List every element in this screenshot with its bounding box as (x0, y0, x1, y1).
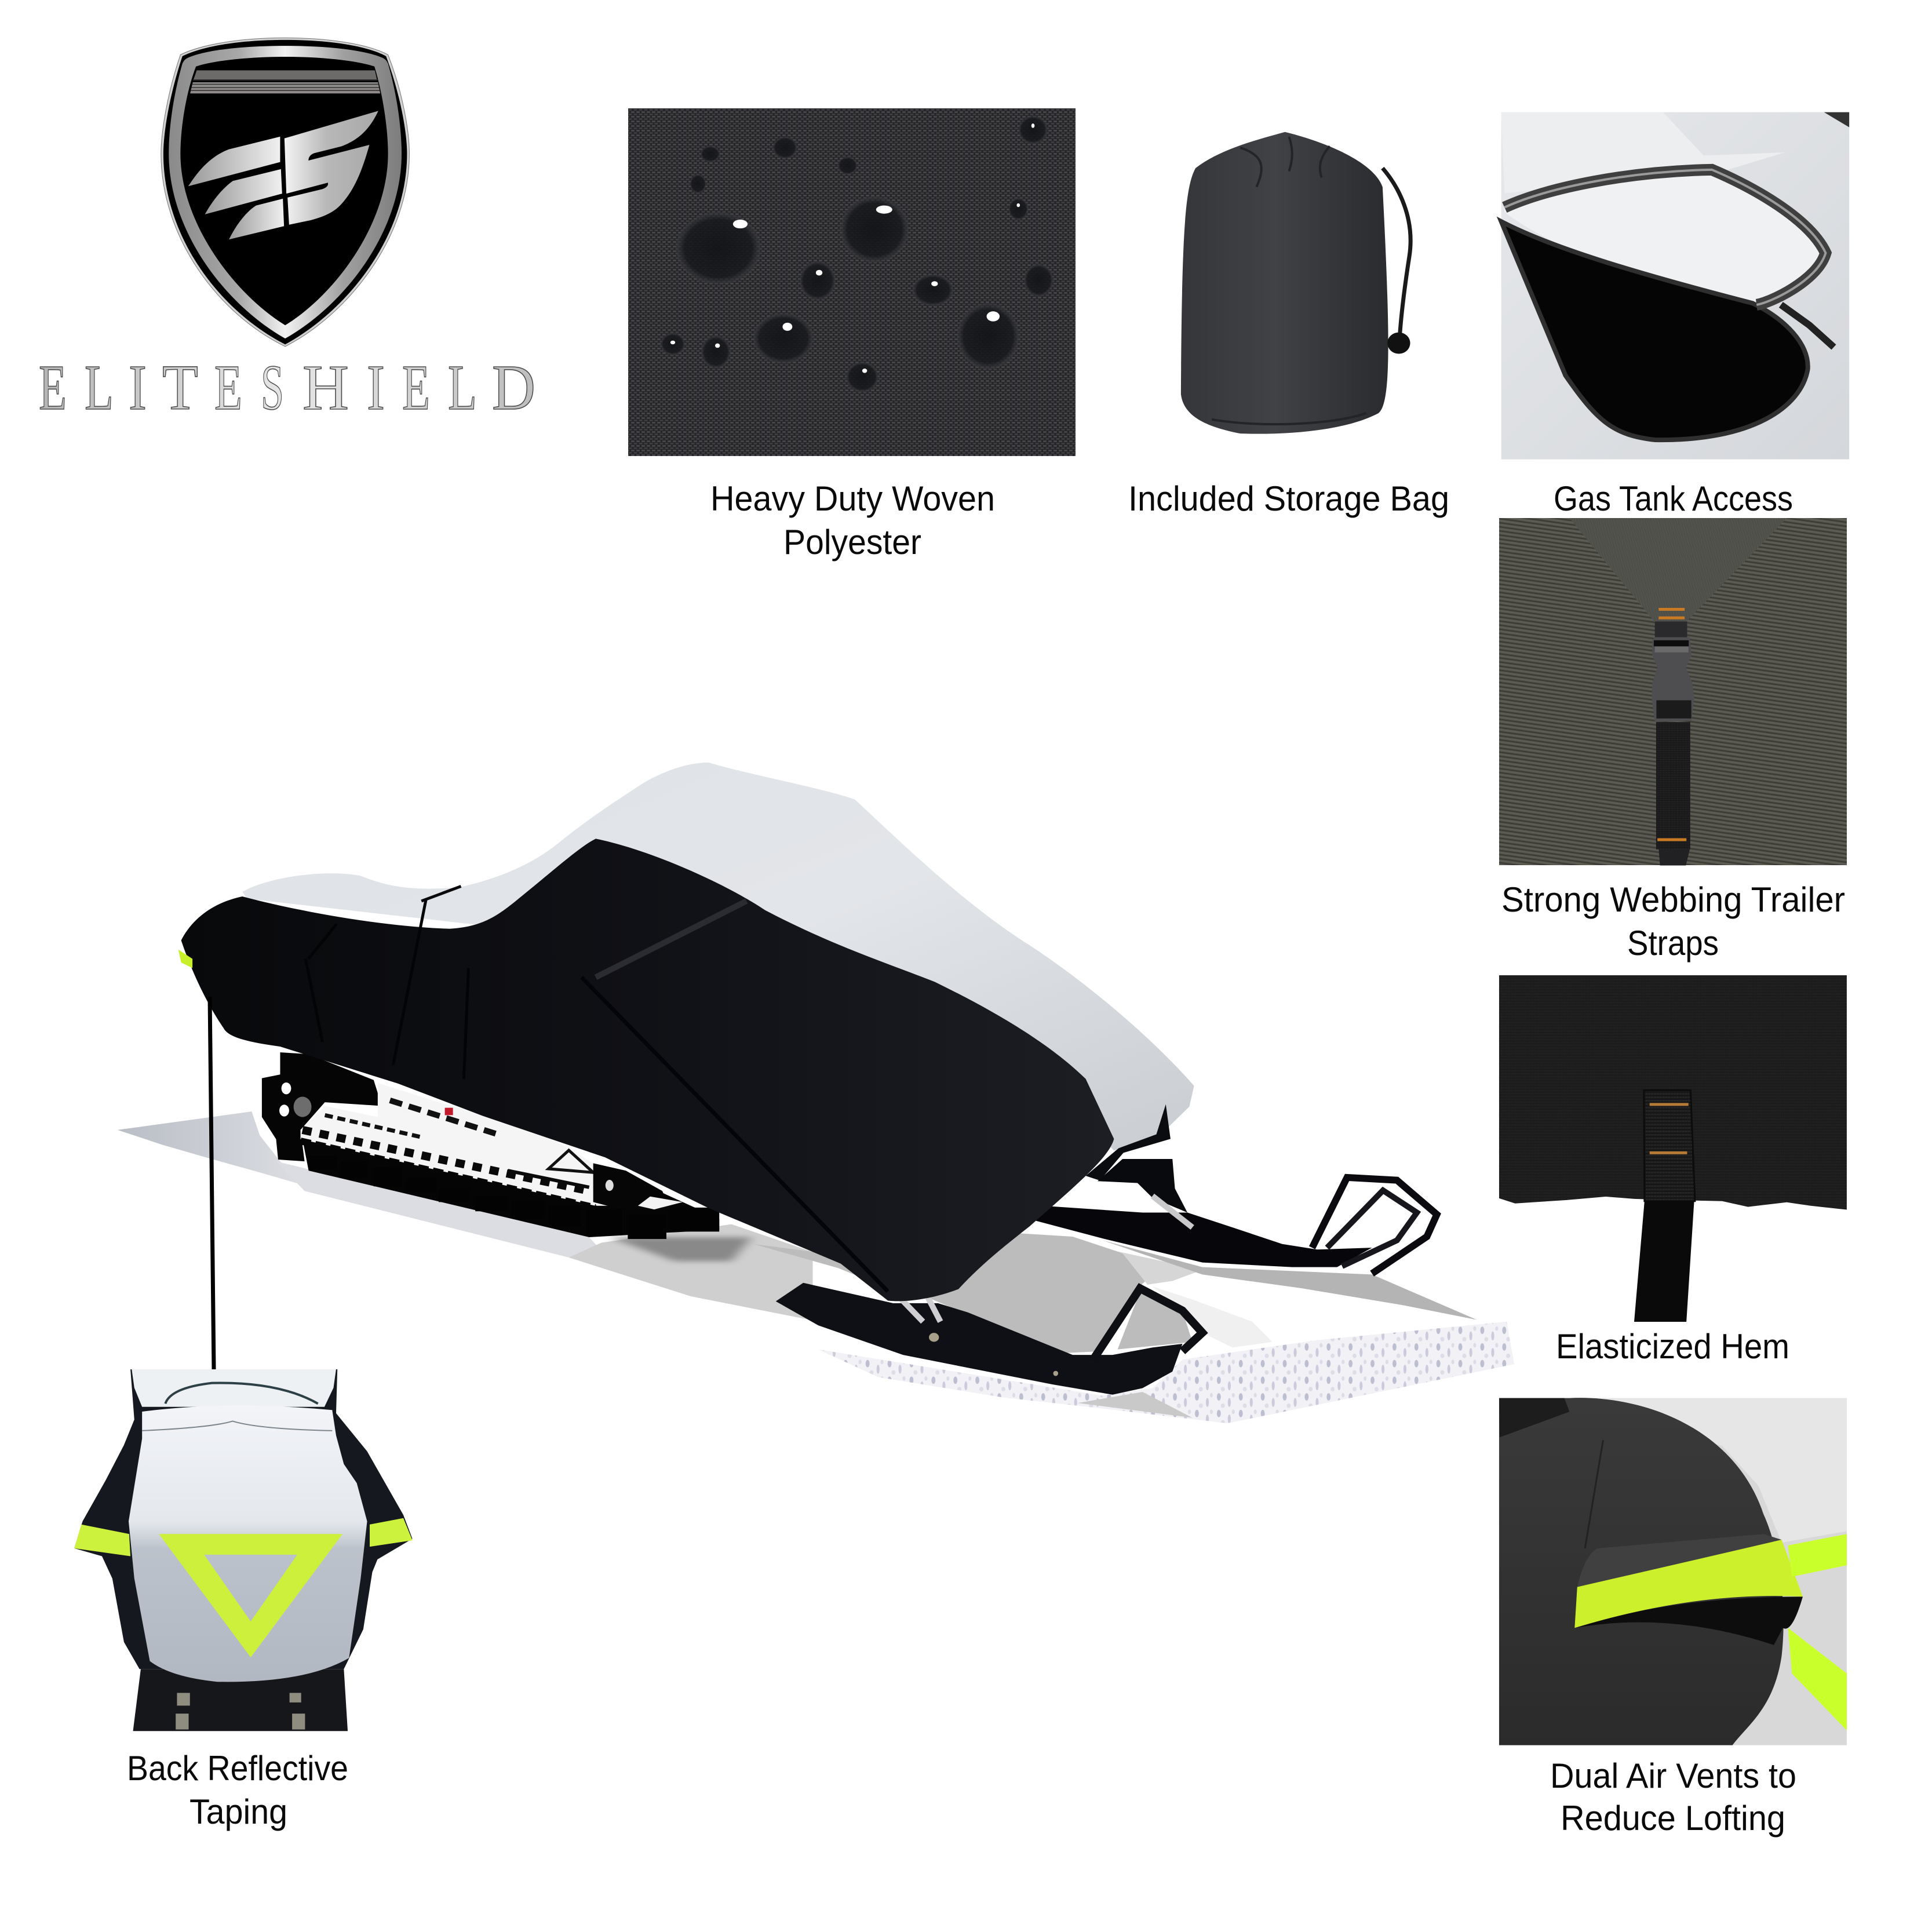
caption: Heavy Duty Woven (710, 479, 995, 518)
panel: elasticized hem (1499, 975, 1847, 1366)
cover: grey top (242, 763, 1194, 1150)
caption (1550, 1756, 1796, 1838)
photo: buckle strap on fabric (1499, 518, 1847, 865)
caption (127, 1749, 348, 1831)
wordmark: ELITESHIELD: D (492, 352, 535, 424)
wordmark: ELITESHIELD: L (85, 352, 114, 424)
caption (1501, 880, 1845, 963)
panel: back reflective taping (74, 1369, 413, 1831)
wordmark: ELITESHIELD: S (261, 352, 284, 424)
wordmark: ELITESHIELD: I (129, 352, 147, 424)
photo: water drops on woven fabric (628, 108, 1076, 456)
arrow: leader line from rear of sled to reflective taping (210, 997, 214, 1369)
wordmark: ELITESHIELD: T (162, 352, 198, 424)
ground: left wedge and shadow under track (118, 1111, 813, 1320)
caption: Straps (1627, 924, 1719, 963)
photo: zippered fuel access flap (1501, 112, 1849, 460)
wordmark: ELITESHIELD: E (402, 352, 430, 424)
caption: Gas Tank Access (1554, 479, 1793, 518)
logo: EliteShield shield and wordmark (39, 38, 535, 424)
caption: Back Reflective (127, 1749, 348, 1788)
wordmark: ELITESHIELD (39, 352, 535, 424)
icon: shield emblem (161, 38, 409, 347)
ground: grey floor and snow under skis (753, 1233, 1514, 1423)
caption: Polyester (783, 523, 921, 562)
panel: strong webbing trailer straps (1499, 518, 1847, 963)
caption: Included Storage Bag (1128, 479, 1449, 518)
panel: dual air vents (1499, 1398, 1847, 1838)
wordmark: ELITESHIELD: E (39, 352, 67, 424)
panel: heavy duty woven polyester (628, 108, 1076, 562)
caption: Reduce Lofting (1561, 1799, 1785, 1838)
photo: gathered hem with webbing tab (1499, 975, 1847, 1322)
wordmark: ELITESHIELD: L (448, 352, 477, 424)
panel: gas tank access (1501, 112, 1849, 518)
front skis (776, 1159, 1437, 1395)
caption: Elasticized Hem (1556, 1327, 1789, 1366)
main illustration: covered snowmobile on snow (118, 763, 1514, 1423)
caption: Strong Webbing Trailer (1501, 880, 1845, 919)
wordmark: ELITESHIELD: E (214, 352, 242, 424)
photo: rear of cover with reflective triangle (74, 1369, 413, 1731)
caption: Dual Air Vents to (1550, 1756, 1796, 1795)
photo: drawstring storage bag (1181, 132, 1410, 434)
caption: Taping (189, 1792, 287, 1831)
cover: black body (178, 839, 1171, 1301)
panel: included storage bag (1128, 132, 1449, 518)
caption (710, 479, 995, 562)
wordmark: ELITESHIELD: I (367, 352, 385, 424)
wordmark: ELITESHIELD: H (302, 352, 349, 424)
track and suspension (262, 1052, 719, 1239)
photo: raised vent with reflective strip (1499, 1398, 1847, 1745)
